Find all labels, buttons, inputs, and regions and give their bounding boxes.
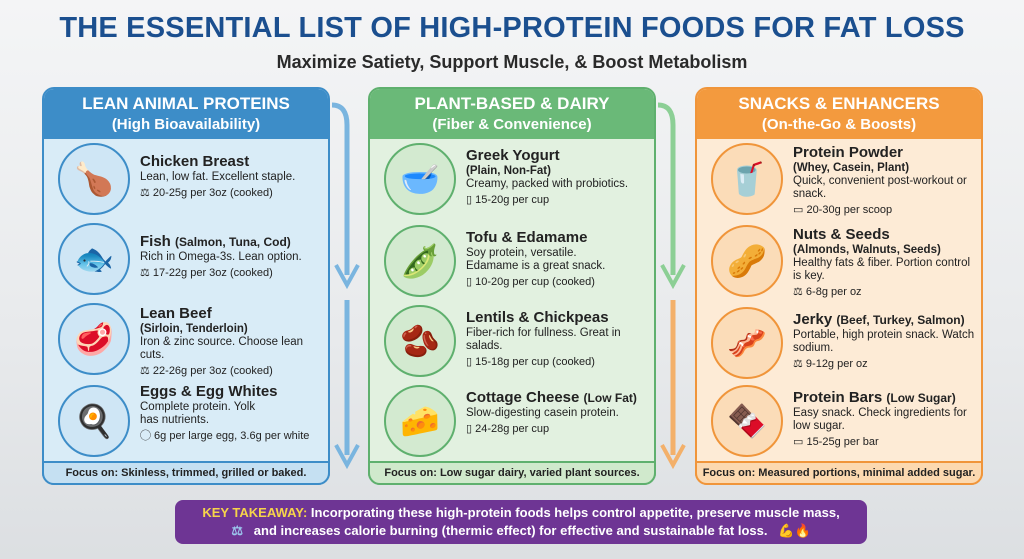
- item: cottage cheese: Slow-digesting casein protein.: [466, 407, 619, 419]
- item: protein powder: (Whey, Casein, Plant): [793, 162, 909, 174]
- item: fish: ⚖ 17-22g per 3oz (cooked): [140, 267, 273, 279]
- item: beef: Iron & zinc source. Choose lean cuts.: [140, 336, 303, 361]
- title: THE ESSENTIAL LIST OF HIGH-PROTEIN FOODS FOR FAT LOSS: [59, 12, 965, 44]
- item: protein bars: ▭ 15-25g per bar: [793, 436, 879, 448]
- item: protein bars: 🍫: [727, 403, 767, 439]
- item: cottage cheese: [384, 385, 637, 457]
- focus bar: [42, 461, 330, 485]
- item: yogurt: Greek Yogurt: [466, 147, 560, 164]
- item: eggs: has nutrients.: [140, 414, 209, 426]
- panel: lean animal proteins: LEAN ANIMAL PROTEINS: [82, 94, 290, 113]
- item: chicken: [58, 143, 295, 215]
- subtitle: Maximize Satiety, Support Muscle, & Boost Metabolism: [277, 52, 747, 72]
- item: lentils: [384, 305, 621, 377]
- item: fish: Rich in Omega-3s. Lean option.: [140, 251, 302, 263]
- item: yogurt: ▯ 15-20g per cup: [466, 194, 549, 206]
- item: chicken: ⚖ 20-25g per 3oz (cooked): [140, 187, 273, 199]
- item: eggs: [58, 383, 309, 457]
- item: lentils: ▯ 15-18g per cup (cooked): [466, 356, 595, 368]
- focus bar: Focus on: Skinless, trimmed, grilled or baked.: [66, 467, 306, 479]
- item: beef: Lean Beef: [140, 305, 212, 322]
- item: nuts: Nuts & Seeds: [793, 226, 890, 243]
- item: protein bars: Protein Bars (Low Sugar): [793, 389, 956, 406]
- item: yogurt: (Plain, Non-Fat): [466, 165, 551, 177]
- item: jerky: 🥓: [727, 325, 767, 361]
- item: chicken: Lean, low fat. Excellent staple.: [140, 171, 295, 183]
- item: cottage cheese: Cottage Cheese (Low Fat): [466, 389, 637, 406]
- item: tofu: Tofu & Edamame: [466, 229, 587, 246]
- item: beef: 🥩: [74, 321, 114, 357]
- item: tofu: [384, 225, 605, 297]
- item: protein powder: [711, 143, 967, 216]
- item: lentils: Fiber-rich for fullness. Great in salads.: [466, 327, 621, 352]
- item: cottage cheese: ▯ 24-28g per cup: [466, 423, 549, 435]
- focus bar: [368, 461, 656, 485]
- key takeaway banner: ⚖ and increases calorie burning (thermic effect) for effective and sustainable fat loss. 💪🔥: [231, 523, 811, 538]
- item: cottage cheese: 🧀: [400, 403, 440, 439]
- item: tofu: ▯ 10-20g per cup (cooked): [466, 276, 595, 288]
- item: jerky: ⚖ 9-12g per oz: [793, 358, 868, 370]
- panel: lean animal proteins: [42, 87, 330, 485]
- item: eggs: Eggs & Egg Whites: [140, 383, 278, 400]
- item: yogurt: 🥣: [400, 161, 440, 197]
- item: nuts: [711, 225, 970, 298]
- item: tofu: Soy protein, versatile.: [466, 247, 577, 259]
- panel: snacks & enhancers: SNACKS & ENHANCERS: [738, 94, 940, 113]
- item: beef: (Sirloin, Tenderloin): [140, 323, 248, 335]
- item: lentils: Lentils & Chickpeas: [466, 309, 609, 326]
- item: fish: [58, 223, 302, 295]
- panel: plant-based & dairy: PLANT-BASED & DAIRY: [415, 94, 609, 113]
- arrow: blue: [332, 102, 360, 469]
- item: protein powder: Quick, convenient post-workout or snack.: [793, 175, 967, 200]
- item: fish: Fish (Salmon, Tuna, Cod): [140, 233, 291, 250]
- item: lentils: 🫘: [400, 323, 440, 359]
- item: chicken: Chicken Breast: [140, 153, 249, 170]
- panel: snacks & enhancers: [695, 87, 983, 485]
- item: eggs: ◯ 6g per large egg, 3.6g per white: [140, 430, 309, 442]
- focus bar: Focus on: Measured portions, minimal added sugar.: [703, 467, 975, 479]
- panel: plant-based & dairy: (Fiber & Convenience): [432, 116, 592, 133]
- panel: lean animal proteins: (High Bioavailability): [112, 116, 260, 133]
- key takeaway banner: KEY TAKEAWAY: Incorporating these high-protein foods helps control appetite, preserve muscle mass,: [202, 505, 840, 520]
- arrow: green: [658, 102, 686, 469]
- item: protein powder: 🥤: [727, 161, 767, 197]
- item: jerky: Jerky (Beef, Turkey, Salmon): [793, 311, 965, 328]
- item: protein powder: Protein Powder: [793, 144, 903, 161]
- item: tofu: Edamame is a great snack.: [466, 260, 605, 272]
- item: protein powder: ▭ 20-30g per scoop: [793, 204, 892, 216]
- panel: snacks & enhancers: (On-the-Go & Boosts): [762, 116, 916, 133]
- item: protein bars: Easy snack. Check ingredients for low sugar.: [793, 407, 967, 432]
- item: yogurt: Creamy, packed with probiotics.: [466, 178, 628, 190]
- item: nuts: Healthy fats & fiber. Portion control is key.: [793, 257, 970, 282]
- item: tofu: 🫛: [400, 243, 440, 279]
- focus bar: [695, 461, 983, 485]
- item: beef: ⚖ 22-26g per 3oz (cooked): [140, 365, 273, 377]
- item: jerky: Portable, high protein snack. Watch sodium.: [793, 329, 974, 354]
- item: jerky: [711, 307, 974, 379]
- item: eggs: 🍳: [74, 403, 114, 439]
- item: beef: [58, 303, 303, 377]
- panel: plant-based & dairy: [368, 87, 656, 485]
- item: yogurt: [384, 143, 628, 215]
- item: eggs: Complete protein. Yolk: [140, 401, 255, 413]
- focus bar: Focus on: Low sugar dairy, varied plant sources.: [384, 467, 640, 479]
- item: chicken: 🍗: [74, 161, 114, 197]
- key takeaway banner: [175, 500, 867, 544]
- item: nuts: (Almonds, Walnuts, Seeds): [793, 244, 941, 256]
- item: protein bars: [711, 385, 967, 457]
- item: nuts: 🥜: [727, 243, 767, 279]
- item: fish: 🐟: [74, 241, 114, 277]
- item: nuts: ⚖ 6-8g per oz: [793, 286, 862, 298]
